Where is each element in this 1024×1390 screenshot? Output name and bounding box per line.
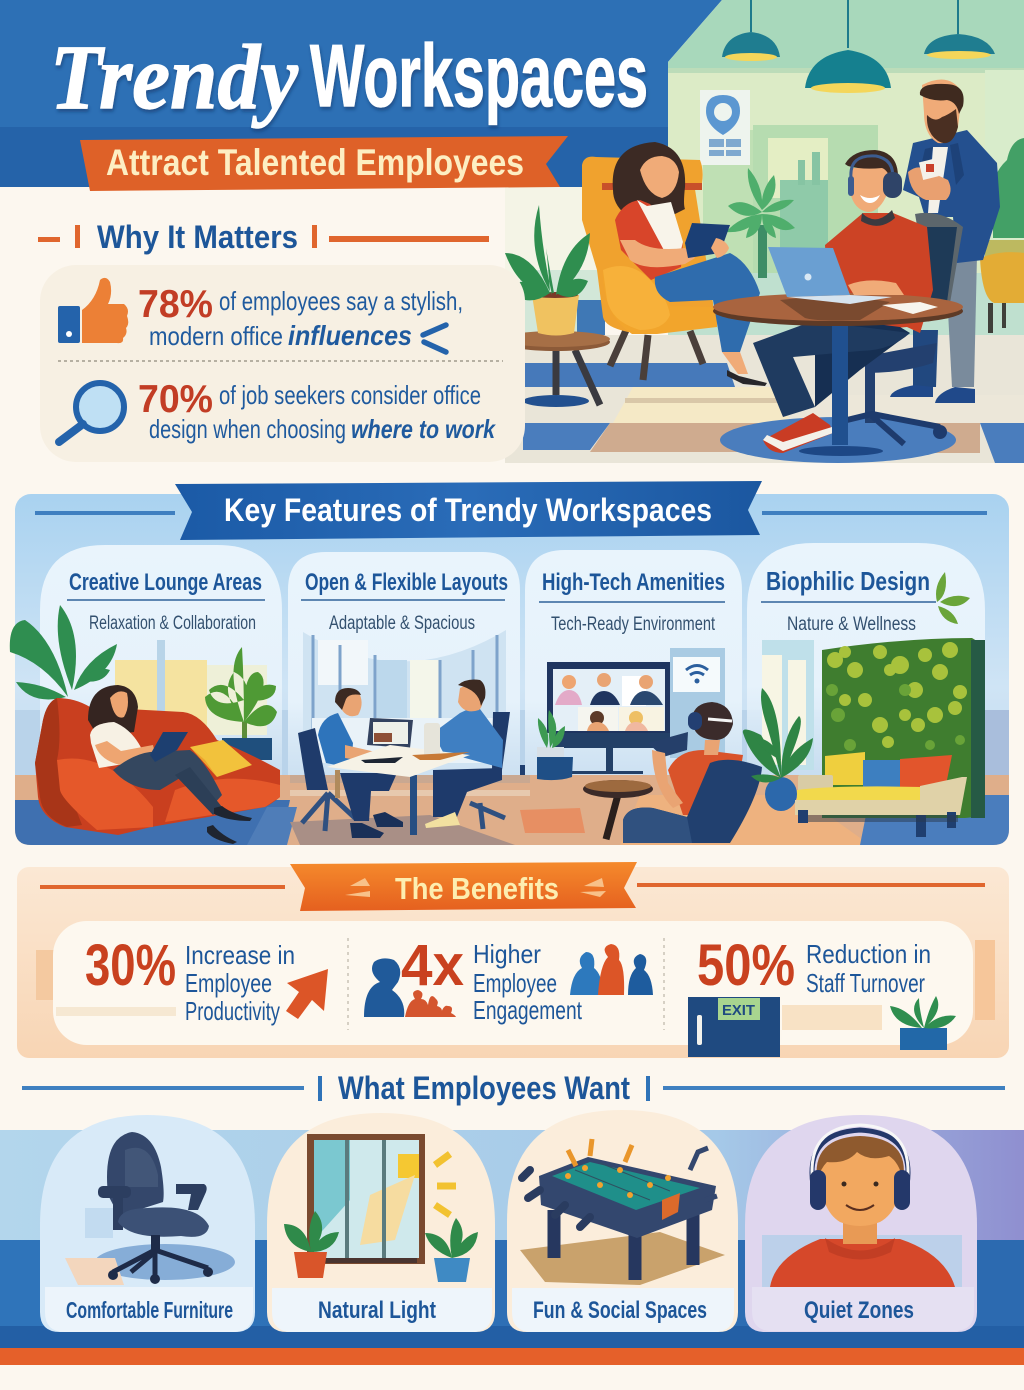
stat: 70% <box>138 378 496 444</box>
stat: 4x: Employee <box>473 968 557 998</box>
stat: 4x: 4x <box>401 933 464 998</box>
icon: window with sun <box>307 1134 456 1264</box>
scene: man in chair with headset <box>583 702 762 843</box>
stat: 78%: influences <box>288 320 412 351</box>
feature card: high tech: Tech-Ready Environment <box>551 614 716 635</box>
card: comfortable furniture <box>40 1115 255 1332</box>
woman in yellow lounge chair <box>582 142 767 386</box>
stat: 78%: 78% <box>138 283 213 326</box>
icon: growth arrow <box>286 969 328 1019</box>
scene: video wall <box>537 648 725 780</box>
heading: what employees want: What Employees Want <box>338 1070 630 1106</box>
icon: exit door: EXIT <box>722 1002 755 1019</box>
feature card: open layouts <box>288 552 520 805</box>
title: Trendy <box>50 26 299 128</box>
subtitle ribbon: Attract Talented Employees <box>106 142 524 183</box>
feature card: creative lounge <box>40 545 282 780</box>
icon: potted plant left <box>284 1211 339 1278</box>
ribbon heading: benefits: The Benefits <box>395 871 559 906</box>
chair right <box>492 712 510 770</box>
header background <box>0 0 722 187</box>
icon: person with headphones <box>770 1125 955 1287</box>
stat: 4x <box>364 933 653 1025</box>
ribbon heading: benefits <box>290 862 637 911</box>
feature card: creative lounge: Relaxation & Collaboration <box>89 613 256 634</box>
stat: 4x: Higher <box>473 939 541 969</box>
floor tiles <box>505 335 1024 463</box>
feature card: high tech <box>520 550 742 815</box>
panel: the benefits <box>17 862 1009 1058</box>
plant: left <box>10 605 117 699</box>
icon: foosball table <box>520 1139 725 1285</box>
stat: 78%: modern office <box>149 321 283 351</box>
icon: potted plant <box>890 996 956 1050</box>
feature card: open layouts: Open & Flexible Layouts <box>305 569 508 596</box>
round table with laptop <box>713 247 963 456</box>
palm plant <box>726 168 795 278</box>
scene: green living wall with sofa <box>743 638 985 837</box>
background band: blue floor and orange strip <box>0 1130 1024 1365</box>
panel: why it matters stats <box>40 265 525 462</box>
card: quiet zones <box>745 1115 977 1332</box>
feature card: biophilic: Biophilic Design <box>766 566 930 596</box>
left colleague <box>318 713 353 768</box>
icon: group of people <box>570 944 653 995</box>
heading: why it matters <box>38 219 489 255</box>
icon: wifi <box>686 666 708 675</box>
card: natural light: Natural Light <box>318 1297 436 1324</box>
office chair <box>915 213 963 303</box>
heading: what employees want <box>22 1070 1005 1106</box>
stat: 30%: 30% <box>85 933 176 998</box>
card: fun and social spaces <box>507 1110 738 1332</box>
feature card: open layouts: Adaptable & Spacious <box>329 613 475 634</box>
icon: potted plant right <box>425 1218 478 1282</box>
icon: team silhouettes <box>364 958 456 1017</box>
title <box>50 26 648 128</box>
floor <box>15 775 1009 845</box>
card: fun and social spaces: Fun & Social Spaces <box>533 1297 707 1324</box>
stat: 4x: Engagement <box>473 995 583 1025</box>
panel: key features <box>10 481 1009 845</box>
stat: 50%: 50% <box>697 933 795 998</box>
feature card: biophilic <box>747 543 1009 795</box>
hero illustration: office scene <box>502 0 1024 463</box>
title: Workspaces <box>310 26 648 125</box>
right colleague <box>433 705 503 768</box>
seated man with headphones <box>753 150 963 453</box>
scene: two colleagues at table <box>298 680 510 838</box>
feature card: biophilic: Nature & Wellness <box>787 614 916 635</box>
standing man <box>890 80 1000 403</box>
office back wall <box>505 0 1024 362</box>
plant on side table <box>502 205 610 407</box>
stat: 50% <box>688 933 956 1057</box>
stat: 78% <box>138 283 463 352</box>
woman on sofa <box>88 685 138 737</box>
icon: office chair <box>65 1132 235 1285</box>
wall poster <box>700 90 750 165</box>
icon: thumbs up <box>58 278 128 343</box>
icon: exit door <box>688 997 780 1057</box>
subtitle ribbon <box>80 136 568 191</box>
stat: 70%: 70% <box>138 378 213 421</box>
heading: why it matters: Why It Matters <box>97 219 298 255</box>
plant: right <box>205 647 277 760</box>
feature card: creative lounge: Creative Lounge Areas <box>69 569 262 596</box>
stat: 50%: Reduction in <box>806 939 931 969</box>
stat: 50%: Staff Turnover <box>806 968 925 998</box>
card: comfortable furniture: Comfortable Furniture <box>66 1297 233 1323</box>
desk <box>410 775 417 835</box>
stat: 70%: of job seekers consider office <box>219 380 481 410</box>
stat: 70%: design when choosing <box>149 414 346 444</box>
ribbon heading: key features: Key Features of Trendy Workspaces <box>224 492 712 528</box>
pendant lamps <box>722 0 995 93</box>
stat: 30%: Employee <box>185 968 272 998</box>
stat: 30% <box>85 933 328 1026</box>
stat: 70%: where to work <box>351 414 496 444</box>
icon: leaf sprig <box>936 572 970 624</box>
chair left <box>298 728 328 790</box>
card: natural light <box>267 1113 495 1332</box>
stat: 78%: of employees say a stylish, <box>219 286 463 316</box>
icon: magnifying glass <box>59 383 124 442</box>
scene: lounge sofa <box>10 605 280 844</box>
benefit card <box>53 921 973 1057</box>
feature card: high tech: High-Tech Amenities <box>542 569 725 596</box>
right cafe chair <box>980 240 1024 333</box>
stat: 30%: Productivity <box>185 996 280 1026</box>
stat: 30%: Increase in <box>185 940 295 970</box>
card: quiet zones: Quiet Zones <box>804 1297 914 1324</box>
ribbon heading: key features <box>175 481 762 540</box>
